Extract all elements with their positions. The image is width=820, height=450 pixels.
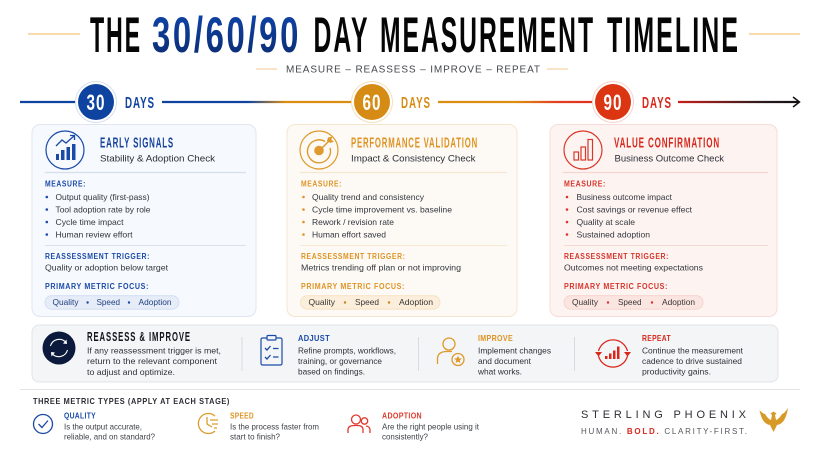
panel: performance validation (287, 124, 517, 316)
improve text (477, 334, 551, 376)
metric: adoption: consistently? (382, 432, 428, 442)
reassess text (87, 330, 221, 377)
metric: quality (34, 412, 155, 442)
icon: people (348, 415, 370, 433)
icon: repeat cycle with bars (595, 340, 631, 367)
icon: check circle (34, 414, 52, 434)
reassessment trigger: Metrics trending off plan or not improving (301, 262, 461, 272)
reassessment trigger: REASSESSMENT TRIGGER: (45, 252, 150, 261)
90 day marker: DAYS (642, 95, 672, 112)
adjust text (298, 334, 396, 376)
adjust text: training, or governance (298, 356, 382, 366)
60 day marker (352, 82, 431, 122)
metric: speed (198, 412, 319, 442)
reassess text: REASSESS & IMPROVE (87, 330, 191, 344)
subheading: Impact & Consistency Check (351, 154, 476, 164)
primary metric focus: PRIMARY METRIC FOCUS: (45, 282, 149, 291)
repeat text (642, 334, 744, 376)
reassessment trigger: REASSESSMENT TRIGGER: (301, 252, 406, 261)
60 day marker: DAYS (401, 95, 431, 112)
60 day marker: 60 (362, 90, 382, 115)
adjust text: based on findings. (298, 366, 365, 376)
icon: clipboard (261, 336, 282, 365)
measure list (301, 180, 452, 240)
panel: value confirmation (550, 124, 777, 316)
primary metric focus: Quality (308, 298, 336, 307)
reassessment trigger (45, 252, 169, 272)
measure list: Rework / revision rate (312, 217, 394, 227)
metric: speed: start to finish? (230, 432, 280, 442)
timeline (20, 82, 800, 122)
improve text: IMPROVE (478, 334, 513, 343)
panel: early signals (32, 124, 256, 316)
measure list: Cost savings or revenue effect (576, 204, 693, 214)
subheading: Stability & Adoption Check (100, 154, 215, 164)
primary metric focus (45, 282, 179, 309)
adjust text: ADJUST (298, 334, 330, 343)
primary metric focus: Quality (572, 298, 599, 307)
primary metric focus: Speed (96, 298, 120, 307)
icon: phoenix (760, 408, 788, 432)
metric: quality: QUALITY (64, 412, 96, 421)
measure list: Cycle time improvement vs. baseline (312, 204, 452, 214)
primary metric focus: Quality (52, 298, 79, 307)
brand: sterling phoenix: STERLING PHOENIX (581, 409, 747, 421)
heading: VALUE CONFIRMATION (614, 136, 720, 152)
90 day marker (592, 82, 672, 122)
30 day marker: DAYS (125, 95, 155, 112)
arrow head (793, 97, 800, 107)
metric: speed: SPEED (230, 412, 254, 421)
primary metric focus: Adoption (662, 298, 695, 307)
subheading: Business Outcome Check (614, 154, 724, 164)
measure list (45, 180, 151, 240)
measure list: MEASURE: (564, 180, 606, 188)
reassessment trigger: REASSESSMENT TRIGGER: (564, 252, 669, 261)
primary metric focus: Speed (355, 298, 379, 307)
icon: navy cycle (42, 332, 76, 364)
measure list: Quality trend and consistency (312, 192, 425, 202)
repeat text: REPEAT (642, 334, 671, 343)
metric: speed: Is the process faster from (230, 422, 319, 432)
title (90, 7, 740, 63)
icon: person with star (438, 338, 464, 366)
primary metric focus (564, 282, 703, 309)
metric: adoption: Are the right people using it (382, 422, 480, 432)
title: 30/60/90 (152, 7, 301, 63)
subtitle: MEASURE – REASSESS – IMPROVE – REPEAT (286, 64, 540, 76)
measure list: Output quality (first-pass) (56, 192, 150, 202)
heading: EARLY SIGNALS (100, 136, 174, 152)
primary metric focus: Adoption (399, 298, 433, 307)
primary metric focus: Speed (618, 298, 642, 307)
reassess text: If any reassessment trigger is met, (87, 346, 221, 356)
icon: target (300, 131, 338, 169)
measure list (564, 180, 693, 240)
repeat text: productivity gains. (642, 366, 711, 376)
30 day marker: 30 (86, 90, 106, 115)
title: THE (90, 7, 142, 63)
icon: rising bar chart (46, 131, 84, 169)
improve text: Implement changes (478, 346, 551, 356)
metric types heading: THREE METRIC TYPES (APPLY AT EACH STAGE) (33, 396, 230, 406)
30 day marker (76, 82, 155, 122)
icon: bars (564, 131, 602, 169)
primary metric focus: PRIMARY METRIC FOCUS: (564, 282, 668, 291)
improve text: and document (478, 356, 532, 366)
90 day marker: 90 (604, 90, 622, 115)
measure list: Cycle time impact (56, 217, 124, 227)
metric: quality: reliable, and on standard? (64, 432, 155, 442)
metric: adoption: ADOPTION (382, 412, 422, 421)
title: MEASUREMENT (380, 7, 595, 63)
heading: PERFORMANCE VALIDATION (351, 136, 478, 152)
brand: sterling phoenix (581, 408, 788, 436)
reassessment trigger (301, 252, 461, 272)
panel: reassess and improve band (32, 325, 778, 382)
measure list: MEASURE: (301, 180, 342, 188)
repeat text: Continue the measurement (642, 346, 744, 356)
measure list: Human review effort (56, 230, 133, 240)
repeat text: cadence to drive sustained (642, 356, 742, 366)
primary metric focus: Adoption (138, 298, 172, 307)
measure list: Quality at scale (576, 217, 635, 227)
metric: quality: Is the output accurate, (64, 422, 142, 432)
measure list: Human effort saved (312, 230, 386, 240)
icon: stopwatch clock (198, 414, 218, 434)
brand: sterling phoenix: HUMAN. BOLD. CLARITY-FIRST. (581, 427, 747, 436)
primary metric focus (300, 282, 440, 309)
measure list: MEASURE: (45, 180, 86, 188)
improve text: what works. (477, 366, 522, 376)
reassess text: return to the relevant component (87, 356, 218, 366)
metric: adoption (348, 412, 480, 442)
reassessment trigger (564, 252, 703, 272)
reassessment trigger: Outcomes not meeting expectations (564, 262, 703, 272)
title: DAY (314, 7, 370, 63)
primary metric focus: PRIMARY METRIC FOCUS: (301, 282, 405, 291)
measure list: Tool adoption rate by role (56, 204, 151, 214)
adjust text: Refine prompts, workflows, (298, 346, 396, 356)
measure list: Business outcome impact (576, 192, 673, 202)
measure list: Sustained adoption (576, 230, 650, 240)
reassessment trigger: Quality or adoption below target (45, 262, 169, 272)
reassess text: to adjust and optimize. (87, 367, 175, 377)
